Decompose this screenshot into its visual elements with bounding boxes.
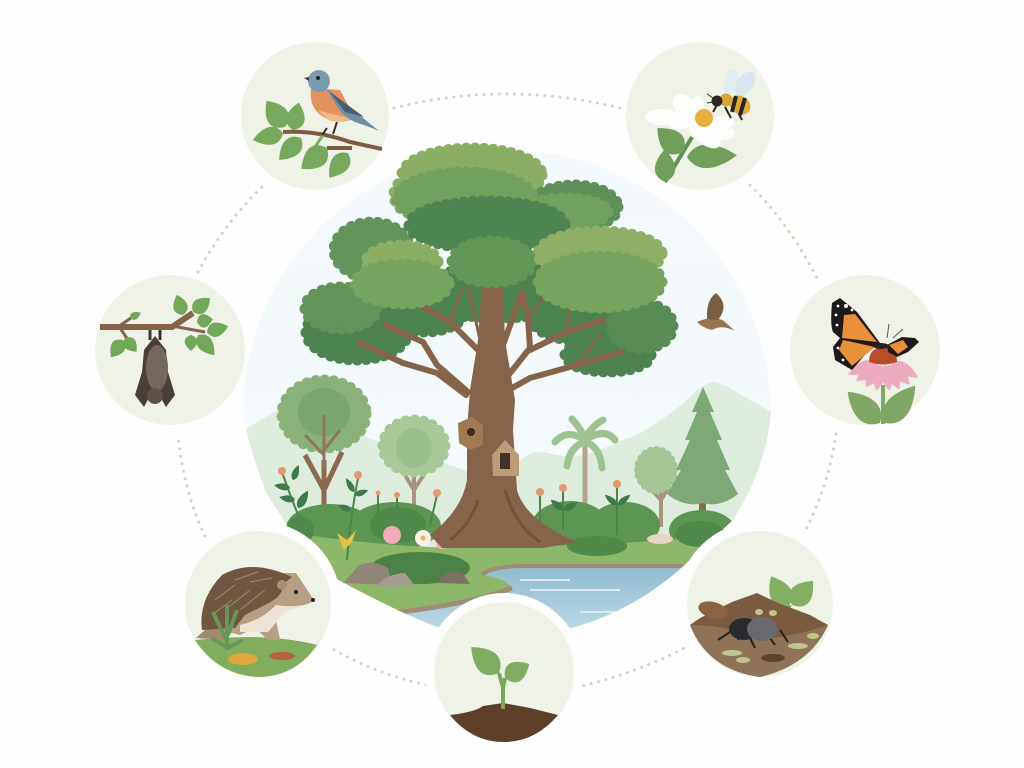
grass bank: [310, 536, 700, 611]
circle: hedgehog: [185, 531, 331, 677]
pond: [390, 566, 684, 628]
main tree trunk: [430, 285, 577, 548]
palm tree: [555, 419, 615, 510]
circle: bat: [95, 275, 245, 425]
circle: beetle in soil: [687, 531, 833, 677]
background tree right: [638, 450, 674, 527]
central scene: [240, 145, 775, 640]
background hills: [240, 382, 775, 560]
rocks: [343, 562, 470, 587]
flying bird: [697, 293, 735, 331]
circle: butterfly on coneflower: [790, 275, 940, 431]
upper canopy: [334, 148, 662, 308]
birdhouses: [458, 417, 519, 476]
sky disc: [243, 150, 770, 470]
circle: songbird: [241, 42, 389, 190]
dotted orbit ring: [178, 94, 836, 686]
lower canopy: [305, 266, 673, 372]
circle: seedling: [434, 602, 574, 742]
background tree middle: [383, 420, 445, 515]
background shrubs: [286, 501, 732, 546]
background tree left: [282, 380, 366, 512]
meadow flowers: [274, 464, 725, 584]
tree branches: [360, 280, 622, 395]
circle: bee on flower: [626, 42, 774, 190]
ecosystem infographic: [95, 42, 940, 742]
white halos around lower circles: [175, 521, 843, 751]
pine tree: [667, 387, 738, 510]
